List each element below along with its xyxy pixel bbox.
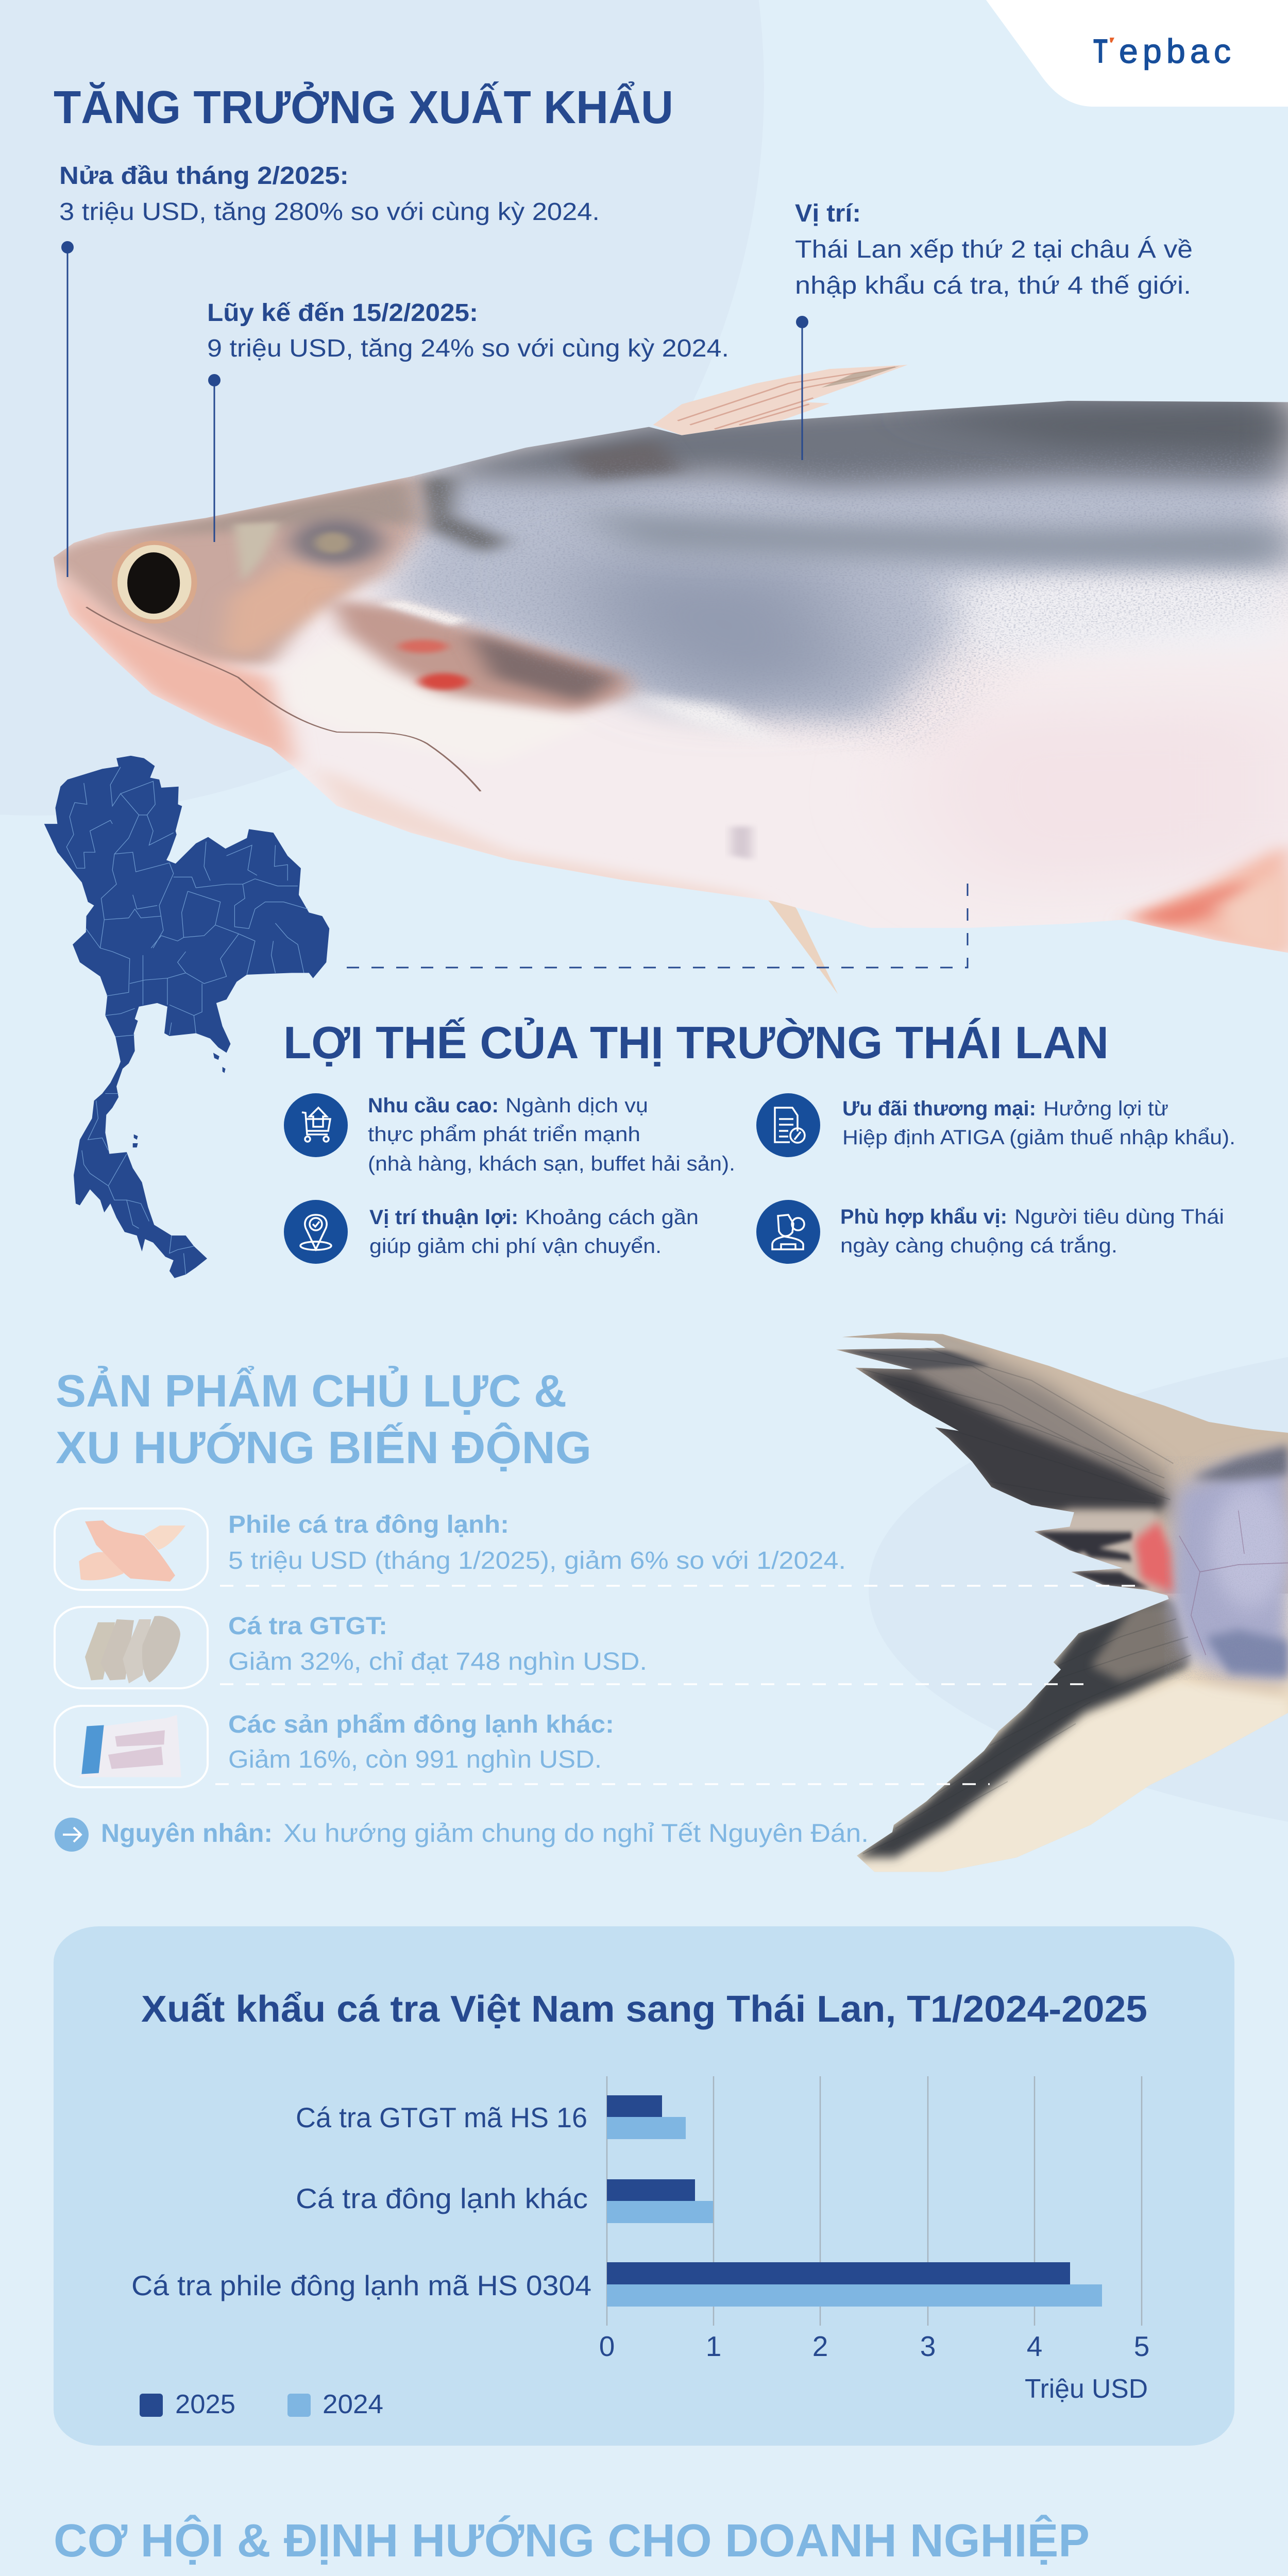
icon: arrow: [55, 1818, 89, 1852]
note: nguyên nhân: Nguyên nhân:: [101, 1819, 273, 1848]
icon: document with percent: [756, 1093, 820, 1157]
heading: Cơ hội và định hướng: CƠ HỘI & ĐỊNH HƯỚNG CHO DOANH NGHIỆP: [54, 2514, 1090, 2567]
image card: fish slices: [55, 1607, 208, 1688]
logo panel: [986, 0, 1288, 107]
chart title: Xuất khẩu cá tra Việt Nam sang Thái Lan, T1/2024-2025: [141, 1989, 1147, 2030]
bar chart: Cá tra đông lạnh khác: [296, 2182, 588, 2214]
image card: fillets: [55, 1509, 208, 1590]
callout: lũy kế đến 15/2/2025: 9 triệu USD, tăng 24% so với cùng kỳ 2024.: [207, 335, 729, 362]
callout: vị trí: Vị trí:: [795, 200, 861, 227]
ventral fin: [731, 855, 838, 994]
note: nguyên nhân: [55, 1818, 869, 1852]
callout: nửa đầu tháng 2/2025: [59, 162, 600, 577]
bar chart: 1: [706, 2330, 721, 2362]
benefit: phù hợp khẩu vị: [756, 1200, 1224, 1264]
callout: nửa đầu tháng 2/2025: 3 triệu USD, tăng 280% so với cùng kỳ 2024.: [59, 198, 600, 226]
image card: packaged fillets: [55, 1706, 208, 1787]
callout: nửa đầu tháng 2/2025: Nửa đầu tháng 2/2025:: [59, 162, 349, 190]
legend: 2025: [175, 2389, 235, 2419]
benefit: nhu cầu cao: Ngành dịch vụ: [505, 1094, 648, 1117]
heading: Tăng trưởng xuất khẩu: TĂNG TRƯỞNG XUẤT KHẨU: [54, 81, 673, 133]
body shape with colour layers: [54, 401, 1288, 953]
benefit: phù hợp khẩu vị: Người tiêu dùng Thái: [1014, 1206, 1224, 1228]
benefit: nhu cầu cao: thực phẩm phát triển mạnh: [368, 1123, 640, 1146]
benefit: nhu cầu cao: (nhà hàng, khách sạn, buffet hải sản).: [368, 1153, 735, 1175]
benefit: vị trí thuận lợi: [284, 1200, 699, 1264]
dashed connector: map to fish: [347, 875, 968, 968]
benefit: nhu cầu cao: Nhu cầu cao:: [368, 1094, 499, 1117]
bar chart: 3: [920, 2330, 936, 2362]
product: các sản phẩm đông lạnh khác: [55, 1706, 614, 1787]
note: nguyên nhân: Xu hướng giảm chung do nghỉ Tết Nguyên Đán.: [283, 1819, 869, 1848]
bar chart: [131, 2076, 1149, 2404]
product: các sản phẩm đông lạnh khác: Các sản phẩm đông lạnh khác:: [228, 1711, 614, 1738]
bar chart: Cá tra phile đông lạnh mã HS 0304: [131, 2269, 591, 2301]
benefit: ưu đãi thương mại: [756, 1093, 1235, 1157]
callout: vị trí: nhập khẩu cá tra, thứ 4 thế giới.: [795, 272, 1191, 299]
bar chart: 4: [1027, 2330, 1042, 2362]
benefit: ưu đãi thương mại: Hưởng lợi từ: [1043, 1097, 1168, 1120]
heading: Sản phẩm chủ lực: [56, 1365, 591, 1473]
background ellipse: behind tail: [869, 1357, 1288, 1822]
callout: vị trí: [795, 200, 1193, 460]
callout: lũy kế đến 15/2/2025: [207, 299, 729, 542]
callout: lũy kế đến 15/2/2025: Lũy kế đến 15/2/2025:: [207, 299, 478, 327]
illustration: fish tail: [824, 1319, 1288, 1886]
benefit: vị trí thuận lợi: Khoảng cách gần: [525, 1206, 699, 1229]
product: phile cá tra đông lạnh: 5 triệu USD (tháng 1/2025), giảm 6% so với 1/2024.: [228, 1547, 846, 1574]
map: Thailand: [44, 756, 329, 1278]
fish eye: [112, 541, 197, 623]
legend: [140, 2389, 383, 2419]
bar chart: 2: [812, 2330, 828, 2362]
icon: consumer with thumbs up: [756, 1200, 820, 1264]
benefit: vị trí thuận lợi: giúp giảm chi phí vận chuyển.: [369, 1235, 662, 1258]
benefit: phù hợp khẩu vị: Phù hợp khẩu vị:: [840, 1206, 1007, 1228]
product: phile cá tra đông lạnh: [55, 1509, 846, 1590]
heading: Sản phẩm chủ lực: SẢN PHẨM CHỦ LỰC &: [56, 1365, 567, 1416]
logo: Tepbac: epbac: [1119, 32, 1231, 70]
product: cá tra GTGT: Cá tra GTGT:: [228, 1613, 387, 1640]
heading: Sản phẩm chủ lực: XU HƯỚNG BIẾN ĐỘNG: [56, 1422, 591, 1473]
bar chart: 5: [1134, 2330, 1149, 2362]
legend: 2024: [323, 2389, 383, 2419]
bar chart: Triệu USD: [1025, 2374, 1148, 2404]
product: phile cá tra đông lạnh: Phile cá tra đông lạnh:: [228, 1511, 509, 1538]
callout: vị trí: Thái Lan xếp thứ 2 tại châu Á về: [795, 236, 1193, 263]
logo: Tepbac: T: [1093, 32, 1108, 71]
product: cá tra GTGT: Giảm 32%, chỉ đạt 748 nghìn USD.: [228, 1648, 647, 1675]
bar chart: Cá tra GTGT mã HS 16: [296, 2102, 587, 2133]
product: cá tra GTGT: [55, 1607, 647, 1688]
panel: chart: [54, 1926, 1234, 2446]
icon: shopping cart: [284, 1093, 348, 1157]
heading: Lợi thế của thị trường Thái Lan: LỢI THẾ CỦA THỊ TRƯỜNG THÁI LAN: [283, 1017, 1109, 1068]
background circle: top left: [0, 0, 764, 816]
product: các sản phẩm đông lạnh khác: Giảm 16%, còn 991 nghìn USD.: [228, 1746, 602, 1773]
benefit: ưu đãi thương mại: Ưu đãi thương mại:: [842, 1097, 1036, 1120]
dorsal fin: [653, 365, 908, 435]
benefit: vị trí thuận lợi: Vị trí thuận lợi:: [369, 1206, 518, 1229]
illustration: fish body: [0, 350, 1288, 994]
benefit: phù hợp khẩu vị: ngày càng chuộng cá trắng.: [840, 1234, 1117, 1257]
benefit: ưu đãi thương mại: Hiệp định ATIGA (giảm thuế nhập khẩu).: [842, 1126, 1235, 1149]
bar chart: 0: [599, 2330, 615, 2362]
icon: location pin: [284, 1200, 348, 1264]
benefit: nhu cầu cao: [284, 1093, 735, 1175]
